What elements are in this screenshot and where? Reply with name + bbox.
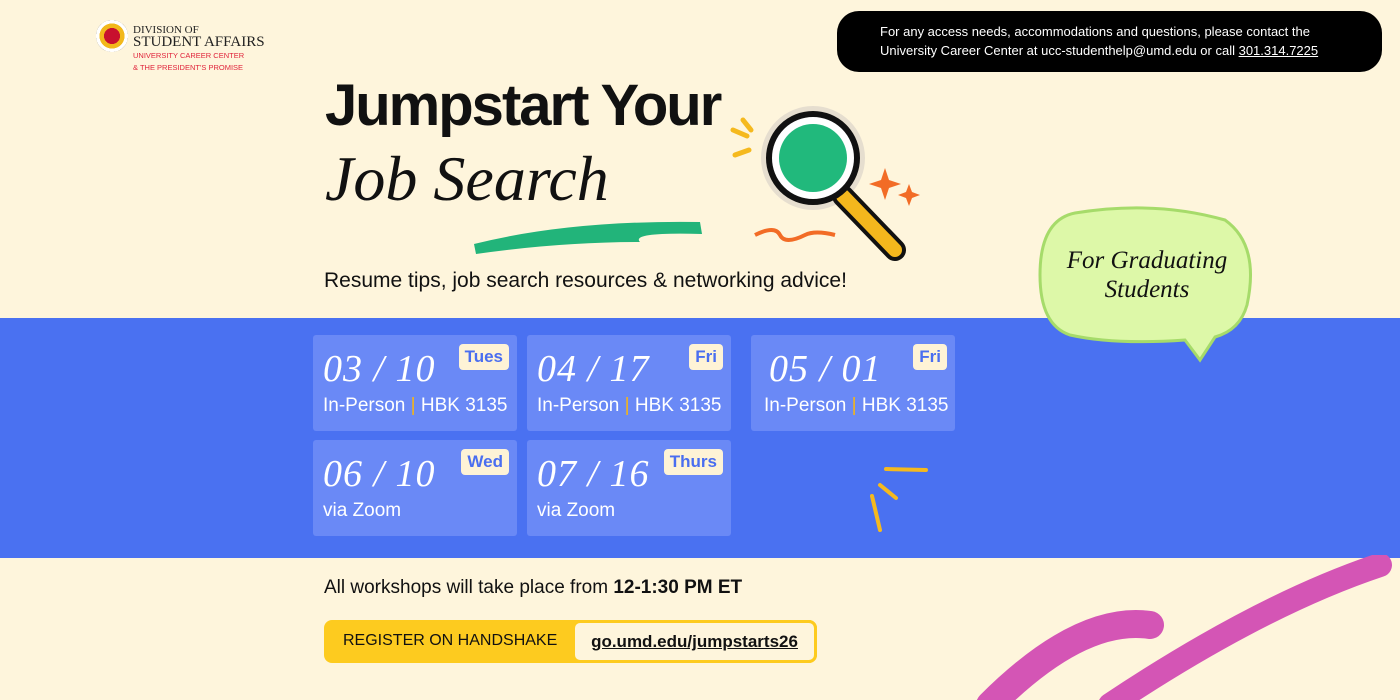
card: 06/10 (313, 440, 517, 536)
title (325, 73, 722, 214)
logo text: & THE PRESIDENT'S PROMISE (133, 63, 243, 72)
contact callout (837, 11, 1382, 72)
card: 04/17: Fri (695, 347, 717, 366)
card: 03/10 (313, 335, 517, 431)
title: Job Search (325, 143, 609, 214)
icon: magnifying glass (730, 106, 920, 261)
card: 04/17: In-Person | HBK 3135 (537, 395, 722, 416)
link box (572, 620, 817, 663)
card: 03/10: In-Person | HBK 3135 (323, 395, 508, 416)
blue band (0, 318, 1400, 558)
card: 05/01 (751, 335, 955, 431)
card: 03/10: Tues (465, 347, 503, 366)
icon: seal (96, 20, 128, 52)
card: 07/16: Thurs (670, 452, 717, 471)
time text: All workshops will take place from 12-1:30 PM ET (324, 577, 742, 598)
card: 06/10: via Zoom (323, 500, 401, 521)
logo text: DIVISION OF (133, 24, 199, 36)
card: 04/17 (527, 335, 731, 431)
speech bubble (1038, 206, 1252, 362)
register button: REGISTER ON HANDSHAKE (343, 632, 557, 649)
contact callout: University Career Center at ucc-studenthelp@umd.edu or call 301.314.7225 (880, 43, 1318, 58)
card: 07/16: 07 / 16 (537, 453, 650, 495)
card: 07/16: via Zoom (537, 500, 615, 521)
pink brush stroke (977, 555, 1392, 700)
logo text (133, 24, 265, 72)
green brush underline (474, 222, 702, 254)
yellow accent strokes (870, 467, 928, 532)
register button (324, 620, 817, 663)
contact callout: For any access needs, accommodations and questions, please contact the (880, 24, 1310, 39)
logo text: UNIVERSITY CAREER CENTER (133, 51, 244, 60)
card: 06/10: 06 / 10 (323, 453, 436, 495)
card: 05/01: In-Person | HBK 3135 (764, 395, 948, 416)
speech bubble: For Graduating (1066, 247, 1227, 274)
card: 07/16 (527, 440, 731, 536)
logo text: STUDENT AFFAIRS (133, 34, 265, 50)
logo (96, 20, 265, 72)
title: Jumpstart Your (325, 73, 720, 138)
subtitle: Resume tips, job search resources & networking advice! (324, 269, 847, 292)
card: 05/01: 05 / 01 (769, 348, 882, 390)
card: 03/10: 03 / 10 (323, 348, 436, 390)
card: 06/10: Wed (467, 452, 503, 471)
card: 04/17: 04 / 17 (537, 348, 650, 390)
link box: go.umd.edu/jumpstarts26 (591, 632, 798, 651)
card: 05/01: Fri (919, 347, 941, 366)
speech bubble: Students (1105, 276, 1189, 303)
